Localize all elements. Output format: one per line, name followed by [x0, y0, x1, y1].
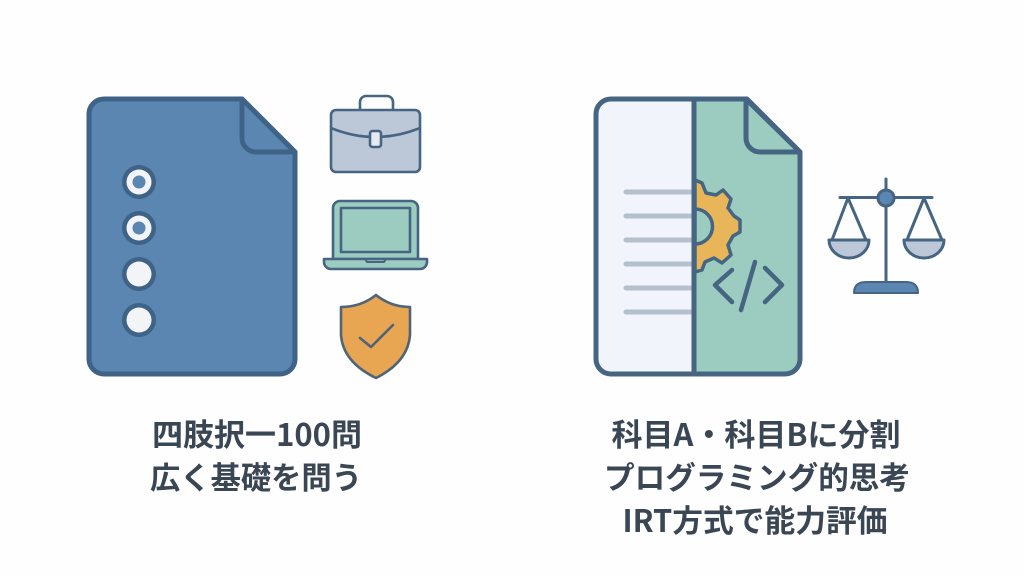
answer options	[122, 165, 156, 337]
icon: code brackets	[715, 262, 782, 310]
icon: gear	[695, 180, 740, 272]
fold of left document	[242, 99, 295, 152]
right caption: プログラミング的思考	[604, 453, 910, 498]
left caption	[150, 410, 362, 498]
left caption: 四肢択一100問	[152, 410, 362, 455]
icon: balance scale	[829, 179, 944, 293]
left document icon	[89, 99, 295, 374]
text lines	[626, 192, 692, 312]
right half of right document	[694, 99, 800, 374]
right document icon	[596, 99, 800, 374]
left half of right document	[596, 99, 694, 374]
right caption: 科目A・科目Bに分割	[612, 410, 900, 455]
icon: briefcase	[331, 96, 420, 172]
left caption: 広く基礎を問う	[150, 453, 362, 498]
fold of right document	[746, 99, 800, 152]
right caption	[604, 410, 910, 541]
icon: laptop	[324, 201, 427, 269]
icon: shield with check	[341, 295, 410, 378]
right caption: IRT方式で能力評価	[622, 496, 888, 541]
